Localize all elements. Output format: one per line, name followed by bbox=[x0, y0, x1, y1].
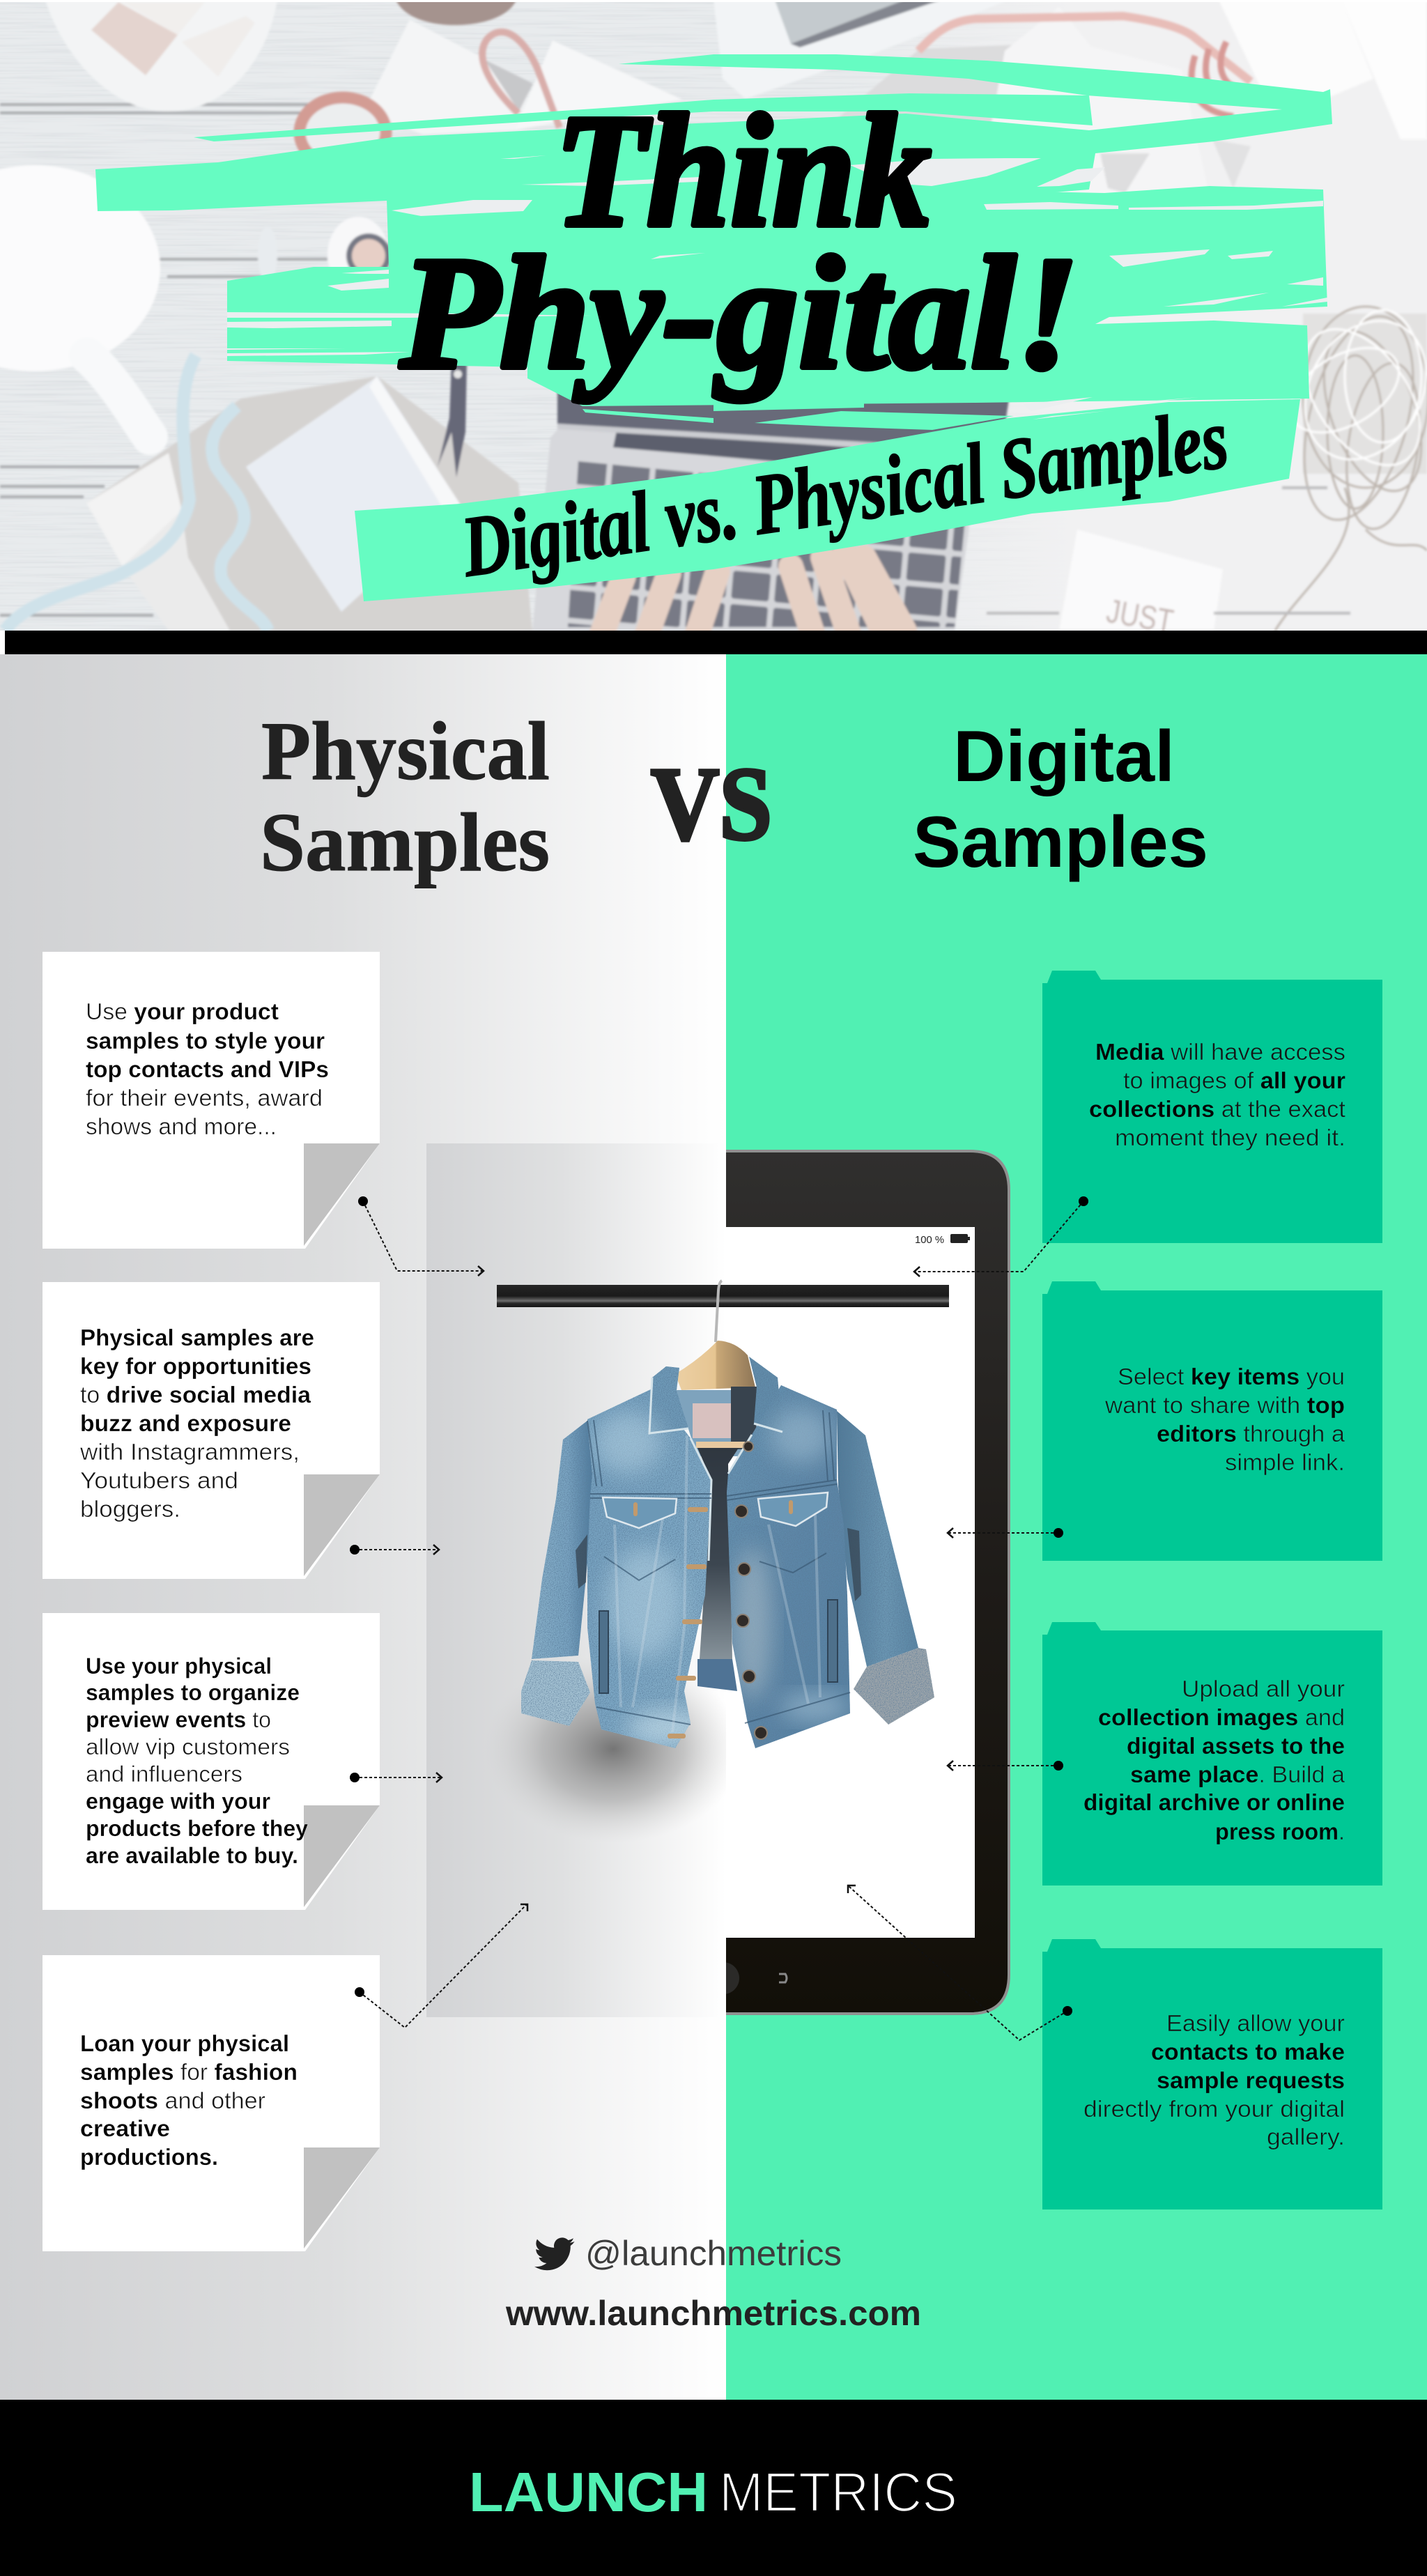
page fold bbox=[304, 1805, 380, 1907]
heading: VS: VS bbox=[651, 746, 772, 862]
clothes rail bbox=[497, 1285, 949, 1307]
icon: twitter bird bbox=[534, 2237, 575, 2270]
card text: productions. bbox=[80, 2144, 218, 2170]
card text: samples to organize bbox=[86, 1680, 300, 1705]
folder text: gallery. bbox=[1267, 2124, 1345, 2150]
card text: creative bbox=[80, 2115, 170, 2141]
central product panel bbox=[426, 1143, 726, 2017]
denim pieces bbox=[521, 1357, 934, 1748]
tablet device bbox=[707, 1151, 1009, 2014]
heading: digital samples bbox=[913, 716, 1208, 883]
right sleeve bbox=[837, 1411, 918, 1667]
left front bbox=[587, 1389, 711, 1748]
pocket flaps bbox=[603, 1493, 828, 1528]
buttons bbox=[735, 1442, 767, 1739]
note card 3 bbox=[43, 1613, 380, 1910]
folder text bbox=[1083, 2010, 1345, 2150]
collar edge bbox=[649, 1378, 782, 1561]
right collar bbox=[749, 1357, 782, 1432]
dark t-shirt bbox=[697, 1448, 739, 1659]
folder text bbox=[1083, 1676, 1345, 1844]
card text: Loan your physical bbox=[80, 2030, 289, 2056]
heading: physical samples: Physical bbox=[261, 704, 550, 797]
neck label bbox=[693, 1403, 731, 1438]
website url: www.launchmetrics.com bbox=[505, 2294, 921, 2333]
folder text: editors through a bbox=[1157, 1421, 1345, 1447]
heading: digital samples: Samples bbox=[913, 802, 1208, 883]
folder text bbox=[1089, 1039, 1345, 1150]
hero photo: desk with laptop bbox=[0, 0, 1427, 641]
folder text: want to share with top bbox=[1104, 1392, 1345, 1418]
card text: Physical samples are bbox=[80, 1325, 314, 1350]
brush stroke texture slivers bbox=[227, 155, 1327, 419]
seam stitches bbox=[615, 1435, 820, 1732]
card text bbox=[79, 1325, 314, 1522]
folder text: Select key items you bbox=[1118, 1364, 1345, 1389]
jacket interior bbox=[677, 1390, 757, 1456]
card text: Youtubers and bbox=[80, 1467, 238, 1493]
welt pockets bbox=[599, 1600, 838, 1693]
card text: shoots and other bbox=[80, 2088, 265, 2113]
page fold bbox=[304, 2147, 380, 2249]
folder text: press room. bbox=[1215, 1819, 1345, 1844]
folder text: Media will have access bbox=[1095, 1039, 1345, 1065]
logo: LAUNCH bbox=[469, 2461, 708, 2523]
card text: bloggers. bbox=[80, 1496, 180, 1522]
black divider bar bbox=[5, 631, 1427, 654]
folder text: simple link. bbox=[1225, 1449, 1345, 1475]
right front bbox=[727, 1385, 850, 1748]
dotted connector arrows bbox=[355, 1201, 1083, 2040]
card text: products before they bbox=[86, 1816, 308, 1841]
heading: physical samples: Samples bbox=[260, 796, 550, 888]
card text: are available to buy. bbox=[86, 1843, 298, 1868]
card text: shows and more... bbox=[86, 1113, 277, 1139]
hero photo: desk with laptop: JUST bbox=[1104, 593, 1176, 641]
wooden hanger bbox=[675, 1341, 755, 1390]
folder text: to images of all your bbox=[1123, 1067, 1345, 1093]
heading: physical samples bbox=[260, 704, 550, 888]
status bar bbox=[915, 1234, 970, 1246]
card text: engage with your bbox=[86, 1789, 270, 1814]
card text: for their events, award bbox=[86, 1085, 323, 1111]
folder text: collection images and bbox=[1098, 1704, 1345, 1730]
card text: samples for fashion bbox=[80, 2059, 298, 2085]
folder text: moment they need it. bbox=[1115, 1125, 1345, 1150]
home and back buttons bbox=[726, 1962, 787, 1994]
folder text: contacts to make bbox=[1151, 2039, 1345, 2065]
card text bbox=[86, 998, 329, 1139]
title: Phy-gital! bbox=[399, 224, 1079, 403]
folder 2 bbox=[1042, 1281, 1382, 1561]
jacket on hanger bbox=[521, 1281, 934, 1748]
page fold bbox=[304, 1143, 380, 1246]
folder text: collections at the exact bbox=[1089, 1096, 1345, 1122]
card text: Use your physical bbox=[86, 1653, 272, 1679]
card text bbox=[80, 2030, 298, 2170]
folder text: digital archive or online bbox=[1083, 1789, 1345, 1815]
note card 4 bbox=[43, 1955, 380, 2251]
title: Think bbox=[555, 82, 931, 261]
folder text: same place. Build a bbox=[1130, 1761, 1345, 1787]
folder text: digital assets to the bbox=[1127, 1733, 1345, 1759]
tablet screen bbox=[726, 1227, 975, 1938]
card text: samples to style your bbox=[86, 1028, 325, 1054]
folder text: Easily allow your bbox=[1166, 2010, 1345, 2036]
panel: physical side background bbox=[0, 654, 726, 2400]
folder 1 bbox=[1042, 971, 1382, 1243]
card text: key for opportunities bbox=[80, 1353, 311, 1379]
page fold bbox=[304, 1474, 380, 1576]
status bar: 100 % bbox=[915, 1234, 944, 1246]
back hem bbox=[697, 1659, 737, 1691]
card text: to drive social media bbox=[80, 1382, 311, 1407]
heading: digital samples: Digital bbox=[953, 716, 1175, 797]
folder text bbox=[1104, 1364, 1345, 1475]
folder text: Upload all your bbox=[1182, 1676, 1345, 1702]
note card 1 bbox=[43, 952, 380, 1249]
left cuff bbox=[521, 1660, 590, 1726]
card text: preview events to bbox=[86, 1707, 271, 1732]
folder 4 bbox=[1042, 1939, 1382, 2209]
folder text: sample requests bbox=[1157, 2067, 1345, 2093]
button holes bbox=[633, 1500, 793, 1738]
card text: allow vip customers bbox=[86, 1734, 290, 1759]
denim fading washes bbox=[589, 1403, 692, 1748]
logo bbox=[469, 2461, 957, 2523]
hanger hook bbox=[716, 1281, 722, 1342]
panel: digital side background bbox=[726, 654, 1427, 2400]
arrow heads and dots bbox=[350, 1196, 1088, 2016]
left collar bbox=[649, 1366, 688, 1433]
right side washes bbox=[733, 1407, 850, 1721]
armpit shadows bbox=[576, 1528, 861, 1601]
card text: and influencers bbox=[86, 1761, 242, 1787]
card text bbox=[86, 1653, 308, 1868]
twitter handle: @launchmetrics bbox=[585, 2234, 842, 2273]
note card 2 bbox=[43, 1282, 380, 1579]
right cuff bbox=[854, 1648, 934, 1725]
jacket shadow bbox=[508, 1671, 726, 1830]
folder text: directly from your digital bbox=[1083, 2096, 1345, 2122]
folder 3 bbox=[1042, 1622, 1382, 1885]
yokes and seams bbox=[587, 1410, 850, 1725]
card text: buzz and exposure bbox=[80, 1410, 291, 1436]
title bbox=[399, 82, 1079, 403]
brush strokes behind title bbox=[95, 54, 1332, 601]
logo: METRICS bbox=[719, 2461, 957, 2523]
footer band bbox=[0, 2400, 1427, 2576]
card text: top contacts and VIPs bbox=[86, 1056, 329, 1082]
card text: Use your product bbox=[86, 998, 279, 1024]
card text: with Instagrammers, bbox=[79, 1439, 300, 1465]
left sleeve bbox=[532, 1421, 592, 1659]
